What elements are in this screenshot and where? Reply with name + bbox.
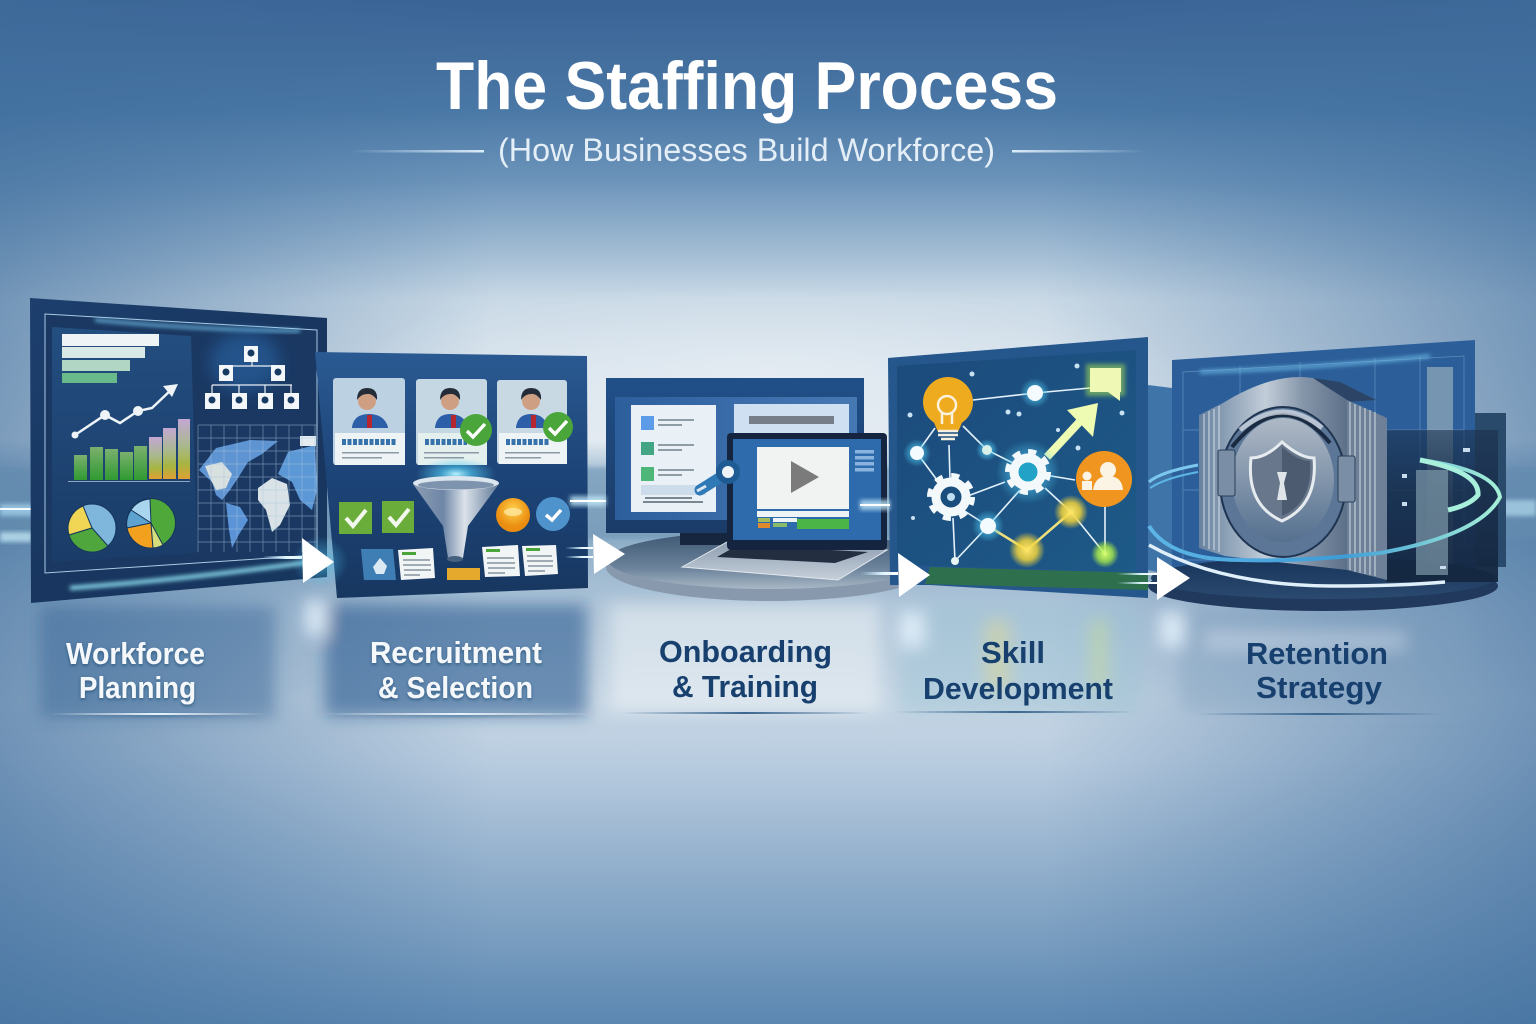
horizontal bars xyxy=(62,334,159,383)
label: skill development xyxy=(895,635,1135,713)
panel frame xyxy=(45,314,317,573)
label: retention strategy xyxy=(1195,636,1445,715)
laptop xyxy=(682,433,887,580)
connector icon xyxy=(697,460,740,491)
back screens xyxy=(1148,340,1506,585)
network connections xyxy=(917,388,1105,561)
side ridges xyxy=(1350,402,1375,576)
label: retention strategy: Retention xyxy=(1246,636,1388,671)
gear left xyxy=(930,476,972,518)
world map xyxy=(198,425,317,552)
network nodes xyxy=(903,364,1124,568)
light bulb icon xyxy=(923,377,973,439)
orange orb xyxy=(496,498,530,532)
header card xyxy=(734,404,849,433)
panel: retention strategy xyxy=(1148,340,1506,611)
bottom light streak xyxy=(70,562,310,588)
label: onboarding and training: & Training xyxy=(672,669,818,704)
orbit swirl xyxy=(1149,460,1500,586)
label: recruitment and selection xyxy=(325,635,590,715)
shield icon xyxy=(1250,442,1314,521)
label: skill development: Skill xyxy=(981,635,1045,670)
pie chart two xyxy=(126,498,176,548)
desktop monitor xyxy=(606,378,864,545)
blue tile xyxy=(361,549,396,580)
arrow: recruitment to onboarding xyxy=(565,534,625,574)
speech bubble xyxy=(1086,364,1125,401)
video player xyxy=(757,447,849,509)
chart backdrop xyxy=(52,327,197,562)
green check squares xyxy=(339,501,414,534)
label: recruitment and selection: & Selection xyxy=(378,670,533,705)
arrow: planning to recruitment xyxy=(262,536,348,588)
label: skill development: Development xyxy=(923,671,1113,706)
growth arrow xyxy=(1047,403,1098,457)
arrow: onboarding to skills xyxy=(860,553,930,597)
progress area xyxy=(757,511,849,529)
vault roof xyxy=(1313,378,1376,402)
candidate card three xyxy=(497,380,567,464)
check badge two xyxy=(460,414,492,446)
frame light streak xyxy=(95,320,300,331)
panel: workforce planning xyxy=(30,298,327,603)
platform xyxy=(1148,557,1498,611)
bar chart xyxy=(68,419,190,482)
label: onboarding and training xyxy=(620,634,870,714)
yellow connections xyxy=(988,512,1071,550)
left ridges xyxy=(1204,406,1219,552)
candidate card two xyxy=(416,379,487,465)
subtitle: (How Businesses Build Workforce) xyxy=(498,132,995,168)
floor reflections xyxy=(40,600,1470,718)
menu lines xyxy=(855,450,874,472)
document two xyxy=(482,545,520,577)
label: onboarding and training: Onboarding xyxy=(659,634,832,669)
round platform xyxy=(606,531,934,601)
gear centre xyxy=(996,440,1060,504)
vault body xyxy=(1199,377,1347,570)
pie chart one xyxy=(68,504,116,552)
blue check circle xyxy=(536,497,570,531)
panel: skill development xyxy=(888,337,1148,598)
document three xyxy=(522,545,558,576)
yellow tab xyxy=(447,568,480,580)
orange people badge xyxy=(1076,451,1132,507)
vault side xyxy=(1347,400,1387,580)
label: retention strategy: Strategy xyxy=(1256,670,1383,705)
check badge three xyxy=(543,412,573,442)
task list document xyxy=(631,405,716,512)
label: workforce planning: Planning xyxy=(79,670,196,705)
label: recruitment and selection: Recruitment xyxy=(370,635,542,670)
label: workforce planning xyxy=(50,636,265,715)
line chart with arrow xyxy=(72,384,178,438)
org chart xyxy=(205,332,299,409)
server racks xyxy=(1386,430,1498,582)
document one xyxy=(398,548,435,580)
panel: recruitment and selection xyxy=(315,352,588,598)
label: workforce planning: Workforce xyxy=(66,636,205,671)
connecting light streaks xyxy=(570,496,890,510)
funnel xyxy=(413,458,499,562)
panel: onboarding and training xyxy=(606,378,934,601)
title: The Staffing Process xyxy=(436,48,1058,124)
arrow: skills to retention xyxy=(1117,557,1190,600)
vault door xyxy=(1218,407,1355,557)
candidate card one xyxy=(333,378,405,465)
